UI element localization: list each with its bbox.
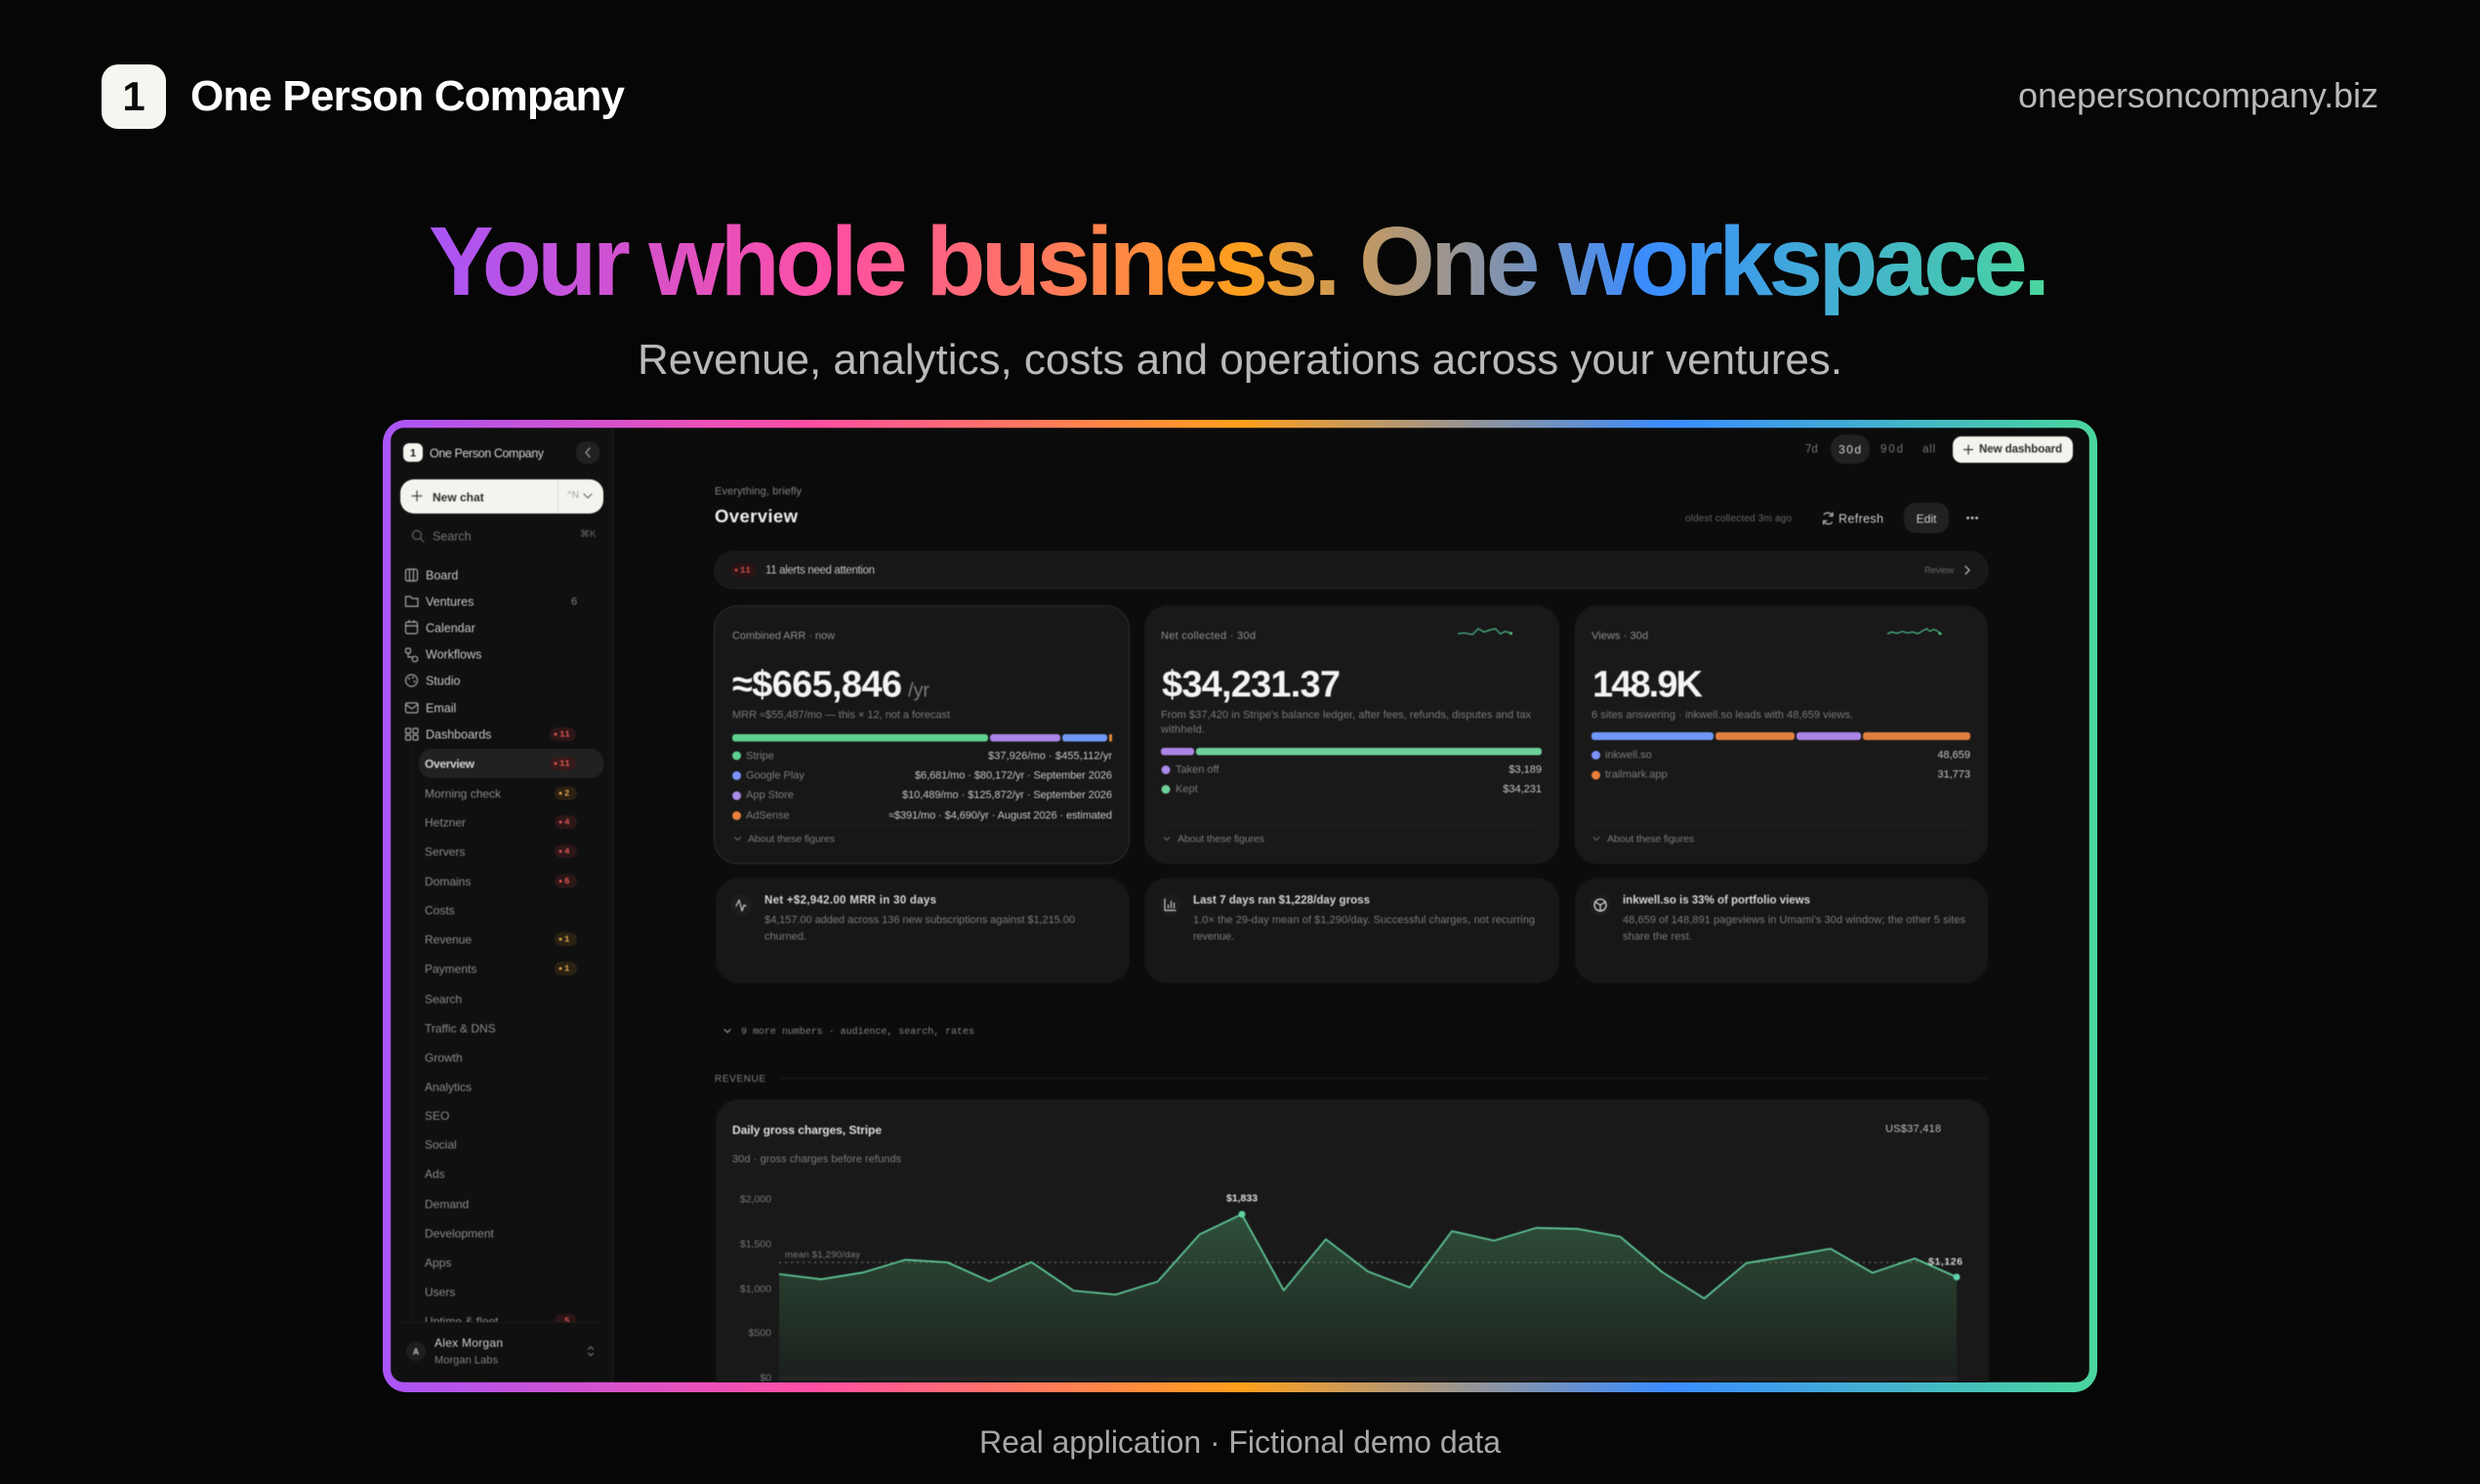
new chat button [400, 479, 603, 514]
card: combined ARR [715, 605, 1129, 863]
disclosure: about figures: About these figures [1178, 834, 1264, 845]
time range tabs: 7d [1805, 444, 1818, 456]
nav: email [406, 702, 456, 716]
nav: calendar: Calendar [426, 622, 475, 636]
insight: portfolio views: share the rest. [1623, 931, 1692, 943]
nav: domains: 6 [564, 877, 569, 886]
insight: last 7 days: 1.0× the 29-day mean of $1,290/day. Successful charges, not recurring [1193, 915, 1535, 927]
card: combined ARR: Combined ARR · now [732, 631, 835, 642]
y axis labels: $1,500 [740, 1239, 771, 1251]
nav: revenue: 1 [564, 935, 570, 945]
callout: peak value: $1,833 [1226, 1193, 1258, 1205]
nav: morning check: 2 [564, 789, 569, 799]
caption: Real application · Fictional demo data [979, 1424, 1501, 1460]
alert bar [715, 552, 1988, 589]
search field [412, 529, 597, 544]
account footer: Alex Morgan [434, 1337, 503, 1350]
search field: ⌘K [580, 529, 597, 540]
insight: net MRR: $4,157.00 added across 136 new subscriptions against $1,215.00 [765, 915, 1075, 927]
legend: views: 48,659 [1937, 750, 1970, 762]
nav: remaining dashboards: Ads [425, 1168, 445, 1181]
card: net collected: Net collected · 30d [1161, 631, 1256, 642]
nav: dashboards [406, 727, 576, 742]
page heading [715, 486, 803, 526]
panel: daily gross charges chart [716, 1099, 1989, 1412]
icon: bar chart [1159, 894, 1180, 916]
insight: last 7 days: Last 7 days ran $1,228/day gross [1193, 895, 1370, 907]
icon: brand logo: 1 [122, 73, 145, 119]
nav: morning check [425, 787, 577, 801]
y axis labels: $500 [749, 1328, 771, 1340]
card: net collected: $34,231.37 [1162, 665, 1341, 706]
card: views: Views · 30d [1591, 631, 1648, 642]
application screenshot [391, 428, 2089, 1412]
gradient frame [383, 420, 2097, 1392]
nav: dashboards: 11 [559, 730, 570, 740]
area chart [779, 1211, 1961, 1381]
page actions [1685, 503, 1978, 533]
brand header [102, 64, 626, 129]
legend: collected: Taken off [1176, 764, 1219, 776]
nav: overview active [419, 749, 603, 778]
nav: board [406, 569, 458, 583]
nav: domains [425, 875, 577, 888]
sparkline: net collected [1458, 629, 1512, 635]
legend: ARR sources: $37,926/mo · $455,112/yr [988, 751, 1112, 763]
stacked bar: ARR by source [732, 734, 1112, 742]
insight: net MRR: Net +$2,942.00 MRR in 30 days [765, 895, 936, 907]
nav: payments: Payments [425, 963, 476, 976]
collapse button [576, 441, 599, 464]
nav: studio: Studio [426, 675, 460, 688]
legend: ARR sources: $10,489/mo · $125,872/yr · September 2026 [902, 790, 1112, 802]
account footer: A [413, 1347, 420, 1357]
alert bar: 11 alerts need attention [765, 565, 875, 577]
legend: ARR sources: App Store [746, 790, 794, 802]
new chat button: ^N [567, 490, 579, 501]
nav: remaining dashboards: 5 [564, 1317, 569, 1327]
time range tabs: 90d [1881, 444, 1903, 456]
page actions: Refresh [1839, 513, 1883, 526]
nav: servers: Servers [425, 845, 465, 859]
nav: remaining dashboards [425, 993, 577, 1329]
nav: ventures [406, 596, 577, 609]
y axis labels: $1,000 [740, 1284, 771, 1296]
nav: ventures: 6 [571, 597, 577, 608]
legend: ARR sources: AdSense [746, 810, 790, 822]
legend: ARR sources: Google Play [746, 770, 805, 782]
search field: Search [433, 530, 472, 544]
new chat button: New chat [433, 491, 484, 505]
insight: last 7 days [1144, 878, 1559, 983]
legend: views [1591, 750, 1970, 781]
legend: ARR sources: ≈$391/mo · $4,690/yr · August 2026 · estimated [889, 810, 1112, 822]
time range tabs [1805, 434, 1935, 464]
nav: payments [425, 962, 577, 976]
nav: studio [406, 675, 460, 688]
panel: daily gross charges chart: US$37,418 [1885, 1124, 1941, 1135]
panel: main dashboard [715, 434, 2073, 1412]
sidebar brand: One Person Company [430, 447, 545, 461]
page heading: Overview [715, 506, 799, 526]
insight: portfolio views: 48,659 of 148,891 pageviews in Umami's 30d window; the other 5 sites [1623, 915, 1966, 927]
nav: remaining dashboards: Growth [425, 1051, 463, 1065]
website url: onepersoncompany.biz [2018, 75, 2378, 115]
nav: remaining dashboards: Analytics [425, 1081, 472, 1094]
nav: remaining dashboards: Users [425, 1286, 455, 1299]
nav: hetzner: 4 [564, 818, 570, 828]
page actions: Edit [1917, 513, 1937, 526]
legend: collected: $34,231 [1503, 784, 1542, 796]
page heading: Everything, briefly [715, 486, 803, 498]
nav: remaining dashboards: Development [425, 1227, 494, 1241]
sparkline: views [1887, 629, 1941, 635]
card: combined ARR: /yr [908, 680, 930, 702]
nav: servers [425, 845, 577, 859]
page actions: oldest collected 3m ago [1685, 514, 1792, 524]
stacked bar: views by site [1591, 732, 1970, 740]
headline: Your whole business. One workspace. [429, 207, 2050, 316]
card: combined ARR: ≈$665,846 [732, 665, 902, 706]
card: views [1574, 605, 1988, 864]
legend: ARR sources: Stripe [746, 751, 774, 763]
nav: costs: Costs [425, 904, 455, 918]
legend: collected: Kept [1176, 784, 1198, 796]
new dashboard button [1953, 436, 2073, 463]
card: views: 6 sites answering · inkwell.so leads with 48,659 views. [1591, 710, 1853, 721]
insight: last 7 days: revenue. [1193, 931, 1234, 943]
card: net collected: withheld. [1160, 724, 1205, 736]
nav: servers: 4 [564, 847, 570, 857]
nav: board: Board [426, 569, 458, 583]
insight: portfolio views [1575, 878, 1988, 983]
account footer [406, 1321, 594, 1367]
legend: ARR sources: $6,681/mo · $80,172/yr · September 2026 [915, 770, 1112, 782]
panel: sidebar [391, 428, 613, 1382]
nav: ventures: Ventures [426, 596, 474, 609]
section label: revenue: REVENUE [715, 1074, 765, 1085]
nav: workflows: Workflows [426, 648, 481, 662]
insight: net MRR [716, 878, 1130, 983]
nav: revenue: Revenue [425, 933, 472, 947]
nav: remaining dashboards: Social [425, 1138, 457, 1152]
nav: remaining dashboards: Search [425, 993, 462, 1007]
y axis labels: $2,000 [740, 1194, 771, 1206]
nav: overview active: Overview [425, 758, 475, 771]
nav: remaining dashboards: Apps [425, 1257, 451, 1270]
sidebar brand [403, 443, 545, 462]
card: views: 148.9K [1592, 665, 1704, 706]
time range tabs: all [1922, 444, 1935, 456]
panel: daily gross charges chart: Daily gross charges, Stripe [732, 1124, 882, 1137]
nav: calendar [406, 621, 475, 636]
nav: revenue [425, 932, 577, 947]
nav: domains: Domains [425, 875, 471, 888]
nav: remaining dashboards: Demand [425, 1198, 469, 1212]
legend: views: trailmark.app [1605, 769, 1668, 781]
panel: daily gross charges chart: 30d · gross charges before refunds [732, 1154, 902, 1166]
card: net collected [1144, 605, 1559, 864]
y axis labels: $0 [760, 1373, 771, 1384]
time range tabs: 30d [1839, 443, 1861, 457]
nav: remaining dashboards: Uptime & fleet [425, 1315, 499, 1329]
stacked bar: taken off vs kept [1161, 748, 1542, 756]
icon: brand logo [102, 64, 166, 129]
disclosure: about figures: About these figures [1607, 834, 1694, 845]
callout: mean: mean $1,290/day [785, 1250, 860, 1260]
nav: remaining dashboards: SEO [425, 1109, 449, 1123]
nav: dashboards: Dashboards [426, 728, 491, 742]
legend: collected [1162, 764, 1542, 796]
brand name: One Person Company [190, 72, 626, 120]
insight: net MRR: churned. [765, 931, 806, 943]
nav: morning check: Morning check [425, 787, 502, 801]
sidebar brand: 1 [410, 448, 416, 460]
y axis labels [740, 1194, 771, 1384]
legend: collected: $3,189 [1509, 764, 1542, 776]
subtitle: Revenue, analytics, costs and operations across your ventures. [638, 336, 1842, 384]
nav: email: Email [426, 702, 456, 716]
icon: globe [1590, 894, 1611, 916]
callout: latest value: $1,126 [1928, 1257, 1963, 1268]
disclosure: more numbers: 9 more numbers · audience, search, rates [741, 1026, 974, 1038]
nav: hetzner: Hetzner [425, 816, 466, 830]
alert bar: Review [1924, 565, 1954, 576]
card: combined ARR: MRR ≈$55,487/mo — this × 12, not a forecast [732, 710, 950, 721]
insight: portfolio views: inkwell.so is 33% of portfolio views [1623, 895, 1810, 907]
legend: views: inkwell.so [1605, 750, 1652, 762]
new dashboard button: New dashboard [1979, 444, 2062, 456]
alert bar: 11 [740, 566, 751, 576]
disclosure: about figures: About these figures [748, 834, 835, 845]
nav: hetzner [425, 815, 577, 830]
legend: views: 31,773 [1937, 769, 1970, 781]
nav: overview active: 11 [559, 760, 570, 769]
account footer: Morgan Labs [434, 1355, 498, 1367]
nav: remaining dashboards: Traffic & DNS [425, 1022, 496, 1036]
card: net collected: From $37,420 in Stripe's balance ledger, after fees, refunds, disputes and tax [1161, 710, 1531, 721]
icon: activity [730, 894, 752, 916]
legend: ARR sources [732, 751, 1112, 822]
nav: payments: 1 [564, 965, 570, 974]
